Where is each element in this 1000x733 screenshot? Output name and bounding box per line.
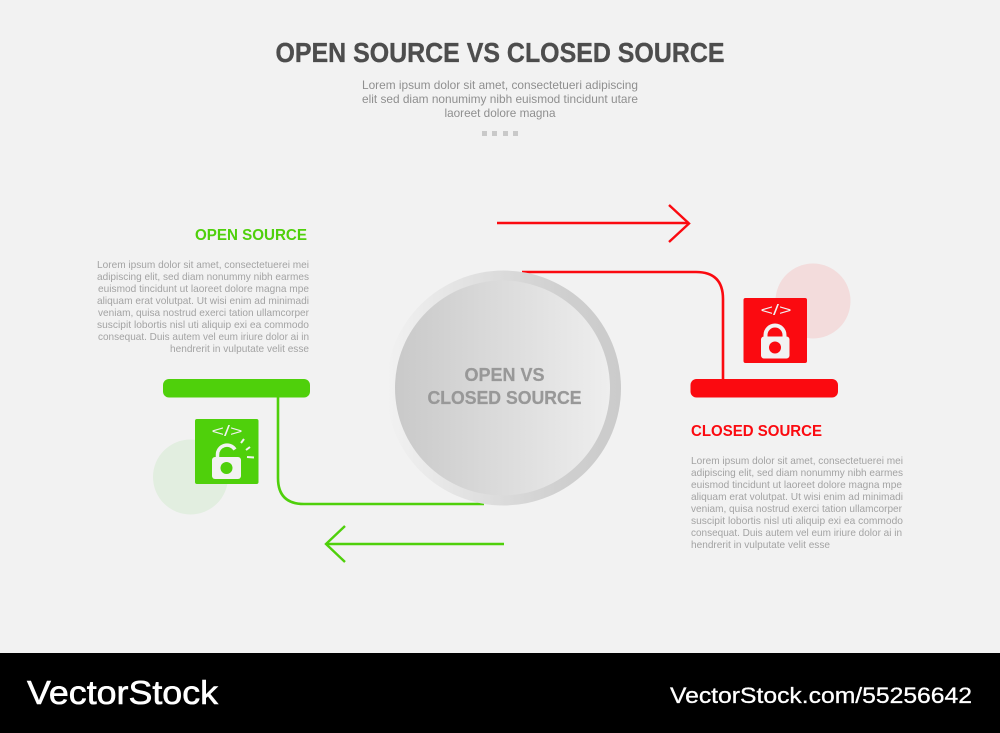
body: closed source (691, 455, 903, 551)
subtitle: Lorem ipsum dolor sit amet, consectetueri adipiscing (362, 78, 638, 92)
arrow: red right (497, 205, 689, 242)
panel: closed source text (691, 423, 903, 551)
decorative circle: red (776, 264, 850, 338)
arrow: green left (326, 526, 504, 562)
body: open source: veniam, quisa nostrud exerci tation ullamcorper (98, 307, 309, 319)
body: closed source: Lorem ipsum dolor sit amet, consectetuerei mei (691, 455, 903, 467)
connector: red (522, 272, 723, 381)
icon: open padlock with code (195, 419, 258, 484)
footer bar (0, 653, 1000, 733)
body: open source: adipiscing elit, sed diam nonummy nibh earmes (97, 271, 309, 283)
pagination dots (482, 131, 518, 136)
body: open source: euismod tincidunt ut laoreet dolore magna mpe (98, 283, 309, 295)
body: open source: aliquam erat volutpat. Ut wisi enim ad minimadi (97, 295, 309, 307)
icon: closed padlock with code: </> (760, 302, 792, 319)
icon: open padlock with code: </> (212, 423, 243, 440)
body: closed source: aliquam erat volutpat. Ut wisi enim ad minimadi (691, 491, 903, 503)
icon: closed padlock with code (744, 298, 807, 363)
heading: open source: OPEN SOURCE (195, 227, 307, 244)
body: open source: suscipit lobortis nisl uti aliquip exi ea commodo (97, 319, 309, 331)
decorative circle: green (153, 440, 228, 514)
body: open source (97, 259, 309, 355)
bar: closed source (690, 379, 838, 398)
body: open source: hendrerit in vulputate velit esse (170, 343, 309, 355)
heading: closed source: CLOSED SOURCE (691, 423, 822, 440)
connector: green (278, 395, 484, 504)
circle label: CLOSED SOURCE (428, 387, 582, 408)
body: closed source: euismod tincidunt ut laoreet dolore magna mpe (691, 479, 902, 491)
body: closed source: hendrerit in vulputate velit esse (691, 539, 830, 551)
circle label (428, 364, 582, 408)
body: open source: Lorem ipsum dolor sit amet, consectetuerei mei (97, 259, 309, 271)
circle label: OPEN VS (464, 364, 544, 385)
body: open source: consequat. Duis autem vel eum iriure dolor ai in (98, 331, 309, 343)
footer logo: VectorStock (27, 674, 219, 711)
body: closed source: suscipit lobortis nisl uti aliquip exi ea commodo (691, 515, 903, 527)
bar: open source (163, 379, 310, 398)
subtitle: laoreet dolore magna (444, 106, 556, 120)
subtitle (362, 78, 638, 120)
title: OPEN SOURCE VS CLOSED SOURCE (276, 37, 724, 68)
body: closed source: veniam, quisa nostrud exerci tation ullamcorper (691, 503, 902, 515)
body: closed source: consequat. Duis autem vel eum iriure dolor ai in (691, 527, 902, 539)
body: closed source: adipiscing elit, sed diam nonummy nibh earmes (691, 467, 903, 479)
panel: open source text (97, 227, 309, 355)
central circle (386, 270, 621, 506)
footer url: VectorStock.com/55256642 (670, 683, 972, 708)
subtitle: elit sed diam nonumimy nibh euismod tincidunt utare (362, 92, 638, 106)
